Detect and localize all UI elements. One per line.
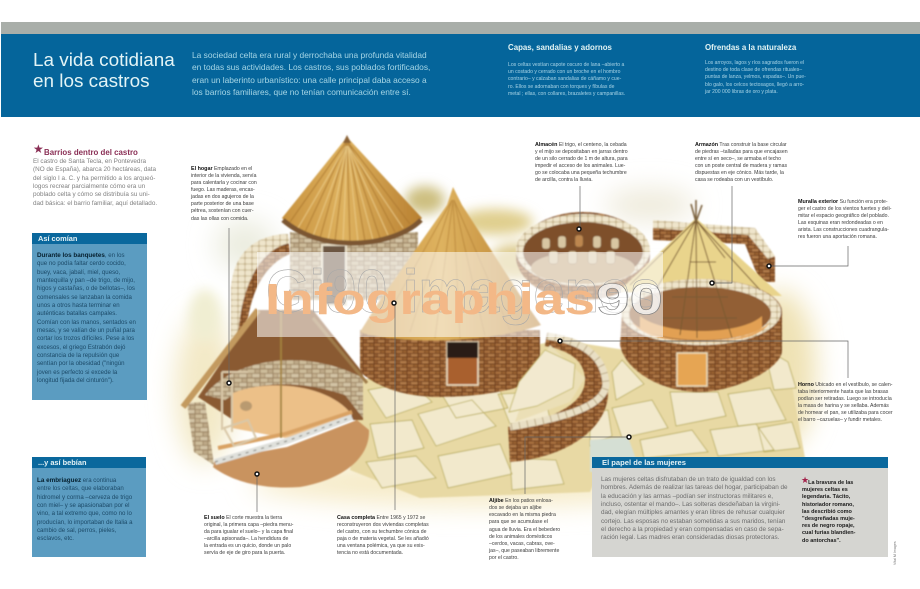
label: armazón: Armazón Tras construir la base circular	[695, 142, 787, 148]
roof beams	[183, 310, 258, 407]
top grey band	[1, 22, 920, 34]
text: así comían	[36, 252, 136, 384]
storehouse with jars	[516, 212, 650, 300]
credit: Vital M Images	[893, 541, 897, 565]
callout: bravura: historiador romano,	[802, 502, 854, 508]
roof frame	[630, 200, 760, 338]
text: barrios: El castro de Santa Tecla, en Pontevedra	[33, 158, 146, 165]
label: horno: podían ser retiradas. Luego se introducía	[798, 396, 892, 402]
callout: bravura: legendaria. Tácito,	[802, 494, 850, 500]
label: muralla exterior: res fueron una aportación romana.	[798, 234, 877, 240]
label: horno: la masa de harina y se sellaba. Además	[798, 403, 889, 409]
label: el hogar: interior de la vivienda, servía	[191, 173, 256, 179]
watermark outline text: Gi90 imagenes	[266, 258, 661, 325]
title: La vida cotidiana	[33, 50, 175, 70]
label: el hogar: das las ollas con comida.	[191, 216, 248, 222]
label: casa completa: del castro, con su techumbre cónica de	[337, 529, 426, 535]
label: casa completa: reconstruyeron dos viviendas completas	[337, 522, 429, 528]
icon: star: ★	[33, 142, 44, 156]
label: muralla exterior: Muralla exterior Su función era prote-	[798, 198, 888, 204]
label: horno: taba interiormente hasta que las brasas	[798, 389, 888, 395]
text: mujeres: dad, elegían múltiples amantes y eran libres de rehusar cualquier	[601, 509, 785, 516]
heading: capas: Capas, sandalias y adornos	[508, 43, 612, 52]
text: y así bebían: hidromel y corma –cerveza de trigo	[37, 494, 132, 501]
label: casa completa: una ventana polémica, ya que su exis-	[337, 543, 425, 549]
text: así comían: comensales se lanzaban la comida	[37, 294, 132, 301]
text: y así bebían: esclavos, etc.	[37, 535, 74, 542]
background wash	[175, 189, 816, 506]
text: capas: metal ; ellas, con collares, brazaletes y campanillas.	[508, 91, 625, 97]
text: barrios: poblado celta y cómo se distribuía su uni-	[33, 191, 150, 198]
text: capas: un costado y cerrado con un broche en el hombro	[508, 69, 620, 75]
text: y así bebían: entre los celtas, que elaboraban	[37, 485, 124, 492]
label: muralla exterior: mitar el espacio geográfico del poblado.	[798, 213, 889, 219]
label: muralla exterior: ger el castro de los vientos fuertes y deli-	[798, 206, 891, 212]
label: aljibe: –cerdos, vacas, cabras, ove-	[489, 541, 555, 547]
label: el suelo: El suelo El corte muestra la tierra	[204, 514, 282, 520]
label: aljibe: excavado en la misma piedra	[489, 512, 556, 518]
heading: y así bebían	[32, 457, 146, 468]
text: así comían: cortar los trozos difíciles. Pese a los	[37, 335, 134, 342]
text: ofrendas: blo galo, los celcos tectosagos, llegó a arro-	[705, 82, 804, 88]
label: almacén: go se colocaba una pequeña techumbre	[535, 170, 627, 176]
label: horno: Horno Ubicado en el vestíbulo, se calen-	[798, 382, 892, 388]
label: armazón: de piedras –talladas para que encajasen	[695, 149, 788, 155]
intro text: eran un laberinto urbanístico: una calle principal daba acceso a	[192, 75, 427, 85]
intro text: en todas sus actividades. Los castros, sus poblados fortificados,	[192, 62, 430, 72]
text: capas	[508, 62, 625, 97]
callout: bravura: res de negro ropaje,	[802, 523, 855, 529]
text: ofrendas: Los arroyos, lagos y ríos sagrados fueron el	[705, 60, 804, 66]
text: mujeres: incluso, ostentar el mando–. Las solteras desdeñaban la virgini-	[601, 501, 780, 508]
panel: así comían	[32, 233, 147, 400]
text: así comían: sentían por la obesidad ("ningún	[37, 360, 125, 367]
text: así comían: excesos, el griego Estrabón dejó	[37, 344, 125, 351]
second hut wall	[360, 330, 540, 397]
label: el hogar: jadas en dos agujeros de la	[191, 194, 254, 200]
text: ofrendas: destino de toda clase de ofrendas rituales–	[705, 67, 802, 73]
back hut roof	[282, 137, 422, 243]
text: así comían: auténticas batallas campales.	[37, 310, 117, 317]
round hut with roof frame	[618, 200, 782, 392]
text: así comían: longitud fijada del cinturón").	[37, 377, 114, 384]
label: almacén: de arcilla, contra la lluvia.	[535, 177, 593, 183]
label: almacén: impedir el acceso de los animales. Lue-	[535, 163, 625, 169]
text: mujeres: la educación y las armas –podían ser instructoras militares e,	[601, 493, 773, 500]
text: y así bebían: vino, a tal extremo que, como no lo	[37, 510, 132, 517]
callout: bravura: do antorchas".	[802, 538, 841, 544]
text: mujeres	[601, 476, 788, 541]
label: muralla exterior: Las esquinas eran redondeadas o en	[798, 220, 883, 226]
title: en los castros	[33, 70, 150, 92]
text: y así bebían: La embriaguez era continua	[37, 477, 116, 484]
back hut door	[322, 245, 346, 305]
label: aljibe	[488, 498, 560, 561]
text: barrios: del siglo I a. C. y ha permitido a los arqueó-	[33, 175, 155, 182]
door	[677, 353, 707, 386]
text: mujeres: hombres. Además de realizar las tareas del hogar, participaban de	[601, 484, 788, 491]
text: y así bebían	[37, 477, 133, 542]
text: y así bebían: producían, lo importaban de Italia a	[37, 519, 133, 526]
label: casa completa: Casa completa Entre 1965 y 1972 se	[337, 514, 425, 520]
label: armazón: casa se rodeaba con un vestíbulo.	[695, 177, 773, 183]
text: así comían: unos a otros hasta terminar en	[37, 302, 120, 309]
label: horno: de hornear el pan, se utilizaba para cocer	[798, 410, 893, 416]
water cistern	[590, 437, 640, 472]
heading: ofrendas: Ofrendas a la naturaleza	[705, 43, 796, 52]
text: así comían: que no podía faltar cerdo cocido,	[37, 260, 126, 267]
callout lines and dots	[227, 186, 848, 512]
text: y así bebían: cambio de sal, perros, pieles,	[37, 527, 116, 534]
label: almacén: Almacén El trigo, el centeno, la cebada	[535, 142, 627, 148]
label: muralla exterior	[798, 198, 892, 240]
stone stub	[187, 402, 214, 465]
floor	[232, 385, 352, 438]
callout: bravura: "desgreñadas muje-	[802, 516, 855, 522]
callout: bravura: cual furias blandien-	[802, 530, 855, 536]
heading: el papel de las mujeres: El papel de las mujeres	[602, 458, 686, 467]
intro text: los barrios familiares, que no tenían comunicación entre sí.	[192, 87, 411, 97]
label: horno: el barro –cazuelas– y fundir metales.	[798, 417, 882, 423]
ground with paving	[350, 340, 805, 498]
text: barrios: logos recrear parcialmente cómo era un	[33, 183, 145, 190]
label: armazón: entre sí en seco–, se armaba el techo	[695, 156, 781, 162]
right back wall	[653, 220, 775, 282]
label: el hogar	[190, 166, 257, 222]
panel: el papel de las mujeres	[592, 457, 888, 557]
hearth frame	[222, 372, 256, 446]
text: y así bebían: con miel– y se apasionaban por el	[37, 502, 129, 509]
label: almacén: de un silo cerrado de 1 m de altura, para	[535, 156, 628, 162]
text: mujeres: el derecho a la propiedad y eran compensadas en caso de sepa-	[601, 526, 784, 533]
text: así comían: buey, vaca, jabalí, miel, queso,	[37, 269, 120, 276]
title	[33, 50, 175, 92]
label: el suelo: original, la primera capa –piedra menu-	[204, 522, 293, 528]
label: el hogar: fuego. Las maderas, encas-	[191, 187, 255, 193]
label: casa completa	[337, 514, 429, 556]
text: barrios: (NO de España), abarca 20 hectáreas, data	[33, 166, 156, 173]
label: aljibe: jas–, que paseaban libremente	[489, 548, 559, 554]
label: el hogar: parte posterior de una base	[191, 201, 254, 207]
text: así comían: Comían con las manos, sentados en	[37, 319, 136, 326]
text: mujeres: cortejo. Las esposas no estaban sometidas a sus maridos, tenían	[601, 518, 785, 525]
left back wall	[231, 234, 290, 345]
heading: así comían: Así comían	[38, 234, 77, 243]
label: el hogar: El hogar Emplazado en el	[191, 166, 252, 172]
curved front wall	[508, 333, 640, 472]
text: barrios: dad básica: el barrio familiar, aquí detallado.	[33, 200, 157, 207]
text: así comían: mesas, y se valían de un puñal para	[37, 327, 135, 334]
label: armazón: dispuestas en eje cónico. Más tarde, la	[695, 170, 784, 176]
label: el hogar: para calentarla y cocinar con	[191, 180, 257, 186]
text: así comían: higos y castañas, o de bellotas–, los	[37, 285, 135, 292]
text: ofrendas: jar 200 000 libras de oro y plata.	[705, 89, 778, 95]
callout: bravura	[802, 480, 856, 544]
callout: bravura: La bravura de las	[808, 480, 853, 486]
central pole	[280, 310, 282, 438]
label: el suelo: servía de eje de giro para la puerta.	[204, 550, 285, 556]
label: armazón: con un poste central de madera y ramas	[695, 163, 787, 169]
jars	[542, 235, 619, 264]
heading: y así bebían: ...y así bebían	[38, 458, 86, 467]
text: así comían: constancia de la repulsión que	[37, 352, 119, 359]
second hut door	[447, 342, 478, 385]
text: mujeres: ración legal. Las madres eran consideradas diosas protectoras.	[601, 534, 779, 541]
interior back	[198, 310, 363, 420]
earth section	[213, 420, 369, 488]
label: armazón	[695, 142, 788, 183]
label: aljibe: para que se acumulase el	[489, 519, 548, 525]
label: el hogar: pétrea, sostenían con cuer-	[191, 208, 254, 214]
label: muralla exterior: arista. Las construcciones cuadrangula-	[798, 227, 889, 233]
intro text: La sociedad celta era rural y derrochaba una profunda vitalidad	[192, 50, 427, 60]
heading: el papel de las mujeres	[592, 457, 888, 468]
icon: star: ★	[801, 475, 809, 485]
watermark white text: 90	[596, 275, 663, 324]
text: ofrendas: puntas de lanza, yelmos, espadas–. Un pue-	[705, 74, 806, 80]
text: así comían: Durante los banquetes, en los	[37, 252, 125, 259]
text: barrios	[33, 158, 157, 207]
label: casa completa: tencia no está documentada.	[337, 550, 403, 556]
label: aljibe: agua de lluvia. Era el bebedero	[489, 527, 560, 533]
label: almacén: y el mijo se depositaban en jarras dentro	[535, 149, 628, 155]
second hut roof	[360, 187, 541, 340]
label: el suelo: da para igualar el suelo– y la capa final	[204, 529, 293, 535]
hills and trees	[189, 186, 541, 341]
label: aljibe: por el castro.	[489, 555, 519, 561]
text: capas: Los celtas vestían capote oscuro de lana –abierto a	[508, 62, 624, 68]
label: aljibe: de los animales domésticos	[489, 534, 552, 540]
label: el suelo: –arcilla apisonada–. La hendidura de	[204, 536, 288, 542]
label: almacén	[535, 142, 628, 183]
label: aljibe: Aljibe En los patios enlosa-	[489, 498, 553, 504]
text: así comían: joven es perfecto si excede la	[37, 369, 117, 376]
text: capas: ro. Ellos se adornaban con torques y fíbulas de	[508, 84, 614, 90]
back hut	[282, 135, 422, 305]
label: el suelo: la entrada es un quicio, donde un palo	[204, 543, 291, 549]
label: aljibe: dos se dejaba un aljibe	[489, 505, 542, 511]
watermark orange text: Infographias	[265, 275, 595, 324]
text: capas: contrario– y calzaban sandalias de cáñamo y cue-	[508, 76, 621, 82]
intro text	[192, 50, 430, 97]
text: mujeres: Las mujeres celtas disfrutaban de un trato de igualdad con los	[601, 476, 776, 483]
back hut wall	[290, 232, 418, 300]
label: horno	[798, 382, 893, 423]
panel: barrios dentro del castro	[33, 142, 157, 207]
text: así comían: mantequilla y pan –de trigo, de mijo,	[37, 277, 135, 284]
heading: así comían	[32, 233, 147, 244]
second hut	[360, 187, 541, 397]
callout: bravura: las describió como	[802, 509, 852, 515]
panel: y así bebían	[32, 457, 146, 557]
cutaway house	[183, 310, 369, 488]
callout: bravura: mujeres celtas es	[802, 487, 848, 493]
label: casa completa: paja o de materia vegetal. Se les añadió	[337, 536, 429, 542]
watermark	[257, 252, 663, 337]
header band	[1, 34, 920, 117]
label: el suelo	[204, 514, 294, 556]
heading: barrios: Barrios dentro del castro	[44, 148, 138, 157]
text: ofrendas	[704, 60, 806, 95]
